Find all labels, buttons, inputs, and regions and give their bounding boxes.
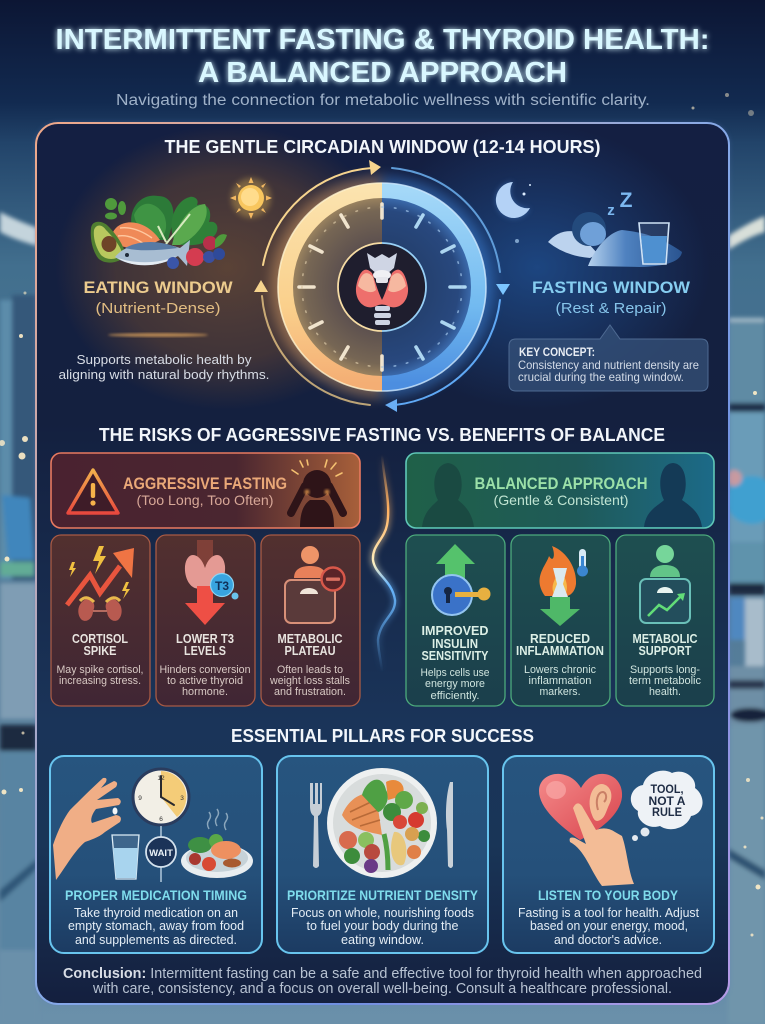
section: essential pillars <box>50 726 714 953</box>
card text: weight loss stalls <box>269 675 351 687</box>
card text: term metabolic <box>629 675 702 687</box>
panel: balanced approach header <box>406 453 714 528</box>
aggressive label: AGGRESSIVE FASTING <box>123 475 287 493</box>
card text: hormone. <box>182 686 228 698</box>
pillar text: empty stomach, away from food <box>68 918 244 933</box>
main panel <box>36 123 729 1004</box>
aggressive label: (Too Long, Too Often) <box>136 492 274 508</box>
icon: clock: 3 <box>180 795 184 802</box>
card: metabolic support <box>616 535 714 706</box>
card: improved insulin sensitivity <box>406 535 505 706</box>
icon: sleeping z: z <box>607 202 615 219</box>
card: lower t3 <box>156 535 255 706</box>
icon: wait badge <box>146 826 176 882</box>
pillar text <box>65 887 247 947</box>
card: cortisol spike <box>51 535 150 706</box>
eating window label: EATING WINDOW <box>84 278 233 297</box>
card text <box>56 632 144 687</box>
pillar text: PRIORITIZE NUTRIENT DENSITY <box>287 887 479 903</box>
conclusion <box>63 966 702 997</box>
card text <box>269 632 351 698</box>
icon: glass of water <box>112 835 139 879</box>
aggressive label <box>123 475 287 508</box>
card text <box>160 632 250 698</box>
title: A BALANCED APPROACH <box>198 57 567 89</box>
card: reduced inflammation <box>511 535 610 706</box>
icon: person sleeping <box>548 212 682 267</box>
card text: Helps cells use <box>420 667 490 679</box>
icon: healthy food cluster <box>91 196 227 269</box>
card text: IMPROVED <box>422 624 488 638</box>
icon: clock: 12 <box>157 775 165 782</box>
text: metabolic health <box>58 352 270 382</box>
pillar: medication timing <box>50 756 262 953</box>
icon: meal plate <box>181 809 253 878</box>
pillar text: Fasting is a tool for health. Adjust <box>518 905 699 920</box>
conclusion: Conclusion: Intermittent fasting can be a safe and effective tool for thyroid health when approached <box>63 966 702 982</box>
icon: heart with ear and finger <box>539 774 634 886</box>
balanced label: (Gentle & Consistent) <box>494 492 628 508</box>
card text: SUPPORT <box>638 644 692 658</box>
card text: health. <box>649 686 681 698</box>
icon: sleeping z <box>607 189 633 219</box>
pillar: nutrient density <box>277 756 488 953</box>
title <box>56 24 710 89</box>
card text: Often leads to <box>277 664 343 676</box>
card text: efficiently. <box>430 690 480 702</box>
pillar: listen to your body <box>503 756 714 953</box>
section: gentle circadian window <box>58 137 708 412</box>
icon: wait badge: WAIT <box>149 848 173 859</box>
heading: circadian window: THE GENTLE CIRCADIAN WINDOW (12-14 HOURS) <box>164 137 600 157</box>
icon: fork <box>310 783 322 868</box>
card text: to active thyroid <box>167 675 243 687</box>
card text: METABOLIC <box>632 632 698 646</box>
callout: key concept <box>509 325 708 391</box>
card text: LEVELS <box>184 644 226 658</box>
icon: moon <box>496 182 531 243</box>
pillar text: to fuel your body during the <box>306 918 458 933</box>
icon: sleeping z: Z <box>620 189 633 212</box>
card text: SENSITIVITY <box>422 649 489 663</box>
left side of room <box>0 300 12 580</box>
fasting window label <box>532 278 691 317</box>
card text <box>420 624 490 702</box>
icon: man silhouette <box>644 463 702 527</box>
icon: clock <box>133 769 189 825</box>
icon: thought cloud: TOOL, <box>650 784 684 796</box>
card text: Supports long- <box>630 664 700 676</box>
icon: rising arrow and kidneys <box>67 546 134 621</box>
icon: clock: 9 <box>138 795 142 802</box>
balanced label: BALANCED APPROACH <box>474 475 648 493</box>
card text: inflammation <box>528 675 592 687</box>
icon: thyroid <box>356 253 408 325</box>
card text: PLATEAU <box>284 644 336 658</box>
text: metabolic health: Supports metabolic health by <box>76 352 252 367</box>
icon: knife <box>446 782 453 868</box>
pillar text: Take thyroid medication on an <box>74 905 238 920</box>
pillar text: and supplements as directed. <box>75 932 237 947</box>
card text: INFLAMMATION <box>516 644 604 658</box>
pillar text: eating window. <box>341 932 424 947</box>
icon: glass of water <box>639 223 669 264</box>
pillar text <box>287 887 479 947</box>
callout: key concept: Consistency and nutrient density are <box>518 359 699 372</box>
callout: key concept: crucial during the eating window. <box>518 371 684 384</box>
icon: hand holding pill <box>53 778 121 880</box>
glowing ring <box>278 183 486 391</box>
card text: REDUCED <box>530 632 590 646</box>
light streak <box>108 333 208 337</box>
callout: key concept: KEY CONCEPT: <box>519 346 595 359</box>
card text <box>629 632 702 698</box>
right side of room <box>728 216 765 250</box>
pillar text: LISTEN TO YOUR BODY <box>538 887 679 903</box>
icon: thought cloud: RULE <box>652 807 682 819</box>
title: INTERMITTENT FASTING & THYROID HEALTH: <box>56 24 710 56</box>
icon: flame joint and down arrow <box>540 546 588 626</box>
fasting window label: FASTING WINDOW <box>532 278 691 297</box>
fasting window label: (Rest & Repair) <box>556 300 667 317</box>
text: metabolic health: aligning with natural body rhythms. <box>58 367 270 382</box>
pillar text: PROPER MEDICATION TIMING <box>65 887 247 903</box>
dial ticks <box>299 204 465 370</box>
card text: and frustration. <box>274 686 346 698</box>
card: metabolic plateau <box>261 535 360 706</box>
icon: person on scale with minus <box>285 546 344 623</box>
icon: plate of food <box>327 768 437 878</box>
card text: increasing stress. <box>59 675 141 687</box>
card text: METABOLIC <box>278 632 342 646</box>
conclusion: with care, consistency, and a focus on overall well-being. Consult a healthcare professional. <box>92 981 672 997</box>
eating window label: (Nutrient-Dense) <box>96 300 220 317</box>
heading: risks vs benefits: THE RISKS OF AGGRESSIVE FASTING VS. BENEFITS OF BALANCE <box>99 425 665 445</box>
card text: LOWER T3 <box>176 632 234 646</box>
divider: energy seam <box>373 455 395 672</box>
card text: CORTISOL <box>72 632 128 646</box>
panel: aggressive fasting header <box>51 453 360 528</box>
center disc <box>338 243 426 331</box>
pillar text: Focus on whole, nourishing foods <box>291 905 474 920</box>
card text: INSULIN <box>432 637 478 651</box>
circular arrows <box>254 160 510 412</box>
card text: May spike cortisol, <box>56 664 144 676</box>
clock: circadian dial <box>271 176 493 398</box>
icon: thyroid and down arrow: T3 <box>215 579 229 593</box>
section: risks vs benefits <box>51 425 714 706</box>
pillar text: and doctor's advice. <box>554 932 662 947</box>
icon: sun <box>230 177 272 219</box>
icon: person on scale with rising chart <box>640 545 690 623</box>
pillar text <box>518 887 699 947</box>
eating window label <box>84 278 233 317</box>
icon: thought cloud <box>631 771 703 841</box>
card text: Lowers chronic <box>524 664 597 676</box>
card text: SPIKE <box>84 644 116 658</box>
heading: essential pillars: ESSENTIAL PILLARS FOR SUCCESS <box>231 726 534 746</box>
balanced label <box>474 475 648 508</box>
icon: clock: 6 <box>159 816 163 823</box>
icon: woman silhouette <box>422 463 474 527</box>
pillar text: based on your energy, mood, <box>530 918 688 933</box>
card text: energy more <box>425 678 485 690</box>
icon: head in hands silhouette <box>291 460 343 527</box>
icon: thought cloud: NOT A <box>648 796 686 808</box>
subtitle: Navigating the connection for metabolic wellness with scientific clarity. <box>116 92 650 109</box>
icon: warning triangle <box>68 470 118 513</box>
card text: Hinders conversion <box>160 664 250 676</box>
card text: markers. <box>540 686 580 698</box>
card text <box>516 632 604 698</box>
icon: thyroid and down arrow <box>185 540 238 625</box>
icon: lock with key and arrow <box>432 544 490 615</box>
